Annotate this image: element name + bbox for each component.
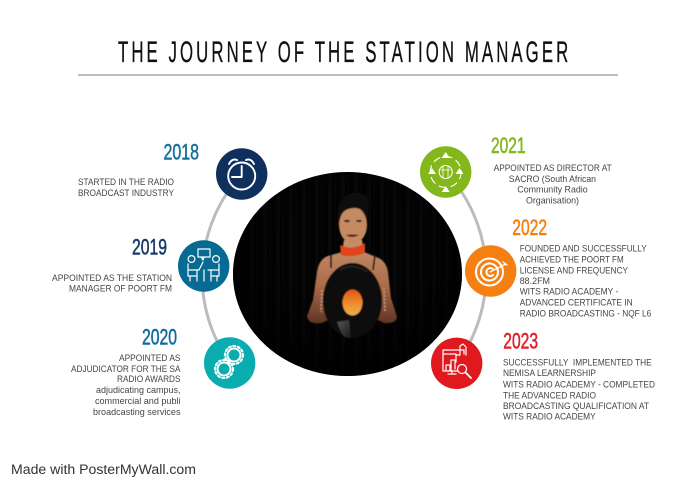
text: 2022 description [520,243,651,320]
icon: target 2022 [465,245,516,297]
text: 2023 description: THE ADVANCED RADIO [503,390,596,401]
text: 2023 description [503,358,655,423]
text: 2021 description: APPOINTED AS DIRECTOR AT [494,163,612,174]
text: 2019 description: APPOINTED AS THE STATION [52,273,172,284]
text: 2021 description: Community Radio [517,184,588,195]
text: 2022 description: WITS RADIO ACADEMY - [520,286,618,297]
text: 2022 description: ADVANCED CERTIFICATE IN [520,298,633,309]
text: 2020 description: commercial and publi [95,396,180,407]
text: 2022 description: FOUNDED AND SUCCESSFULLY [520,243,647,254]
title: THE JOURNEY OF THE STATION MANAGER [118,36,568,69]
text: 2021 description [494,163,612,206]
text: 2018 description [78,177,175,199]
text: 2021 description: SACRO (South African [509,174,596,185]
text: 2023 description: WITS RADIO ACADEMY [503,412,596,423]
footer credit: Made with PosterMyWall.com [11,462,196,477]
year: 2020: 2020 [142,324,177,350]
year: 2018: 2018 [164,140,199,164]
woman holding vinyl record [307,193,397,338]
icon: network 2021 [420,146,471,198]
icon: analytics 2023 [431,338,482,389]
text: 2023 description: SUCCESSFULLY IMPLEMENTED THE [503,358,652,369]
text: 2021 description: Organisation) [526,195,579,206]
text: 2022 description: ACHIEVED THE POORT FM [520,254,624,265]
text: 2018 description: STARTED IN THE RADIO [78,177,174,188]
text: 2020 description: adjudicating campus, [96,385,180,396]
text: 2022 description: 88.2FM [520,276,550,287]
timeline ring [202,172,486,363]
text: 2020 description: broadcasting services [93,407,181,418]
year: 2022: 2022 [512,215,547,240]
text: 2023 description: BROADCASTING QUALIFICATION AT [503,401,649,412]
text: 2023 description: WITS RADIO ACADEMY - COMPLETED [503,379,655,390]
text: 2023 description: NEMISA LEARNERSHIP [503,368,596,379]
text: 2019 description [52,273,172,294]
text: 2018 description: BROADCAST INDUSTRY [78,188,175,199]
title rule [78,74,618,76]
year: 2023: 2023 [503,328,538,354]
text: 2022 description: LICENSE AND FREQUENCY [520,265,629,276]
text: 2020 description: RADIO AWARDS [117,374,180,385]
icon: clock 2018 [216,148,267,200]
icon: gears 2020 [204,337,255,389]
text: 2020 description: APPOINTED AS [119,353,180,364]
text: 2022 description: RADIO BROADCASTING - NQF L6 [520,309,651,320]
year: 2021: 2021 [491,133,526,158]
text: 2020 description: ADJUDICATOR FOR THE SA [71,364,181,375]
text: 2019 description: MANAGER OF POORT FM [69,284,172,294]
central photo [230,170,465,378]
year: 2019: 2019 [132,234,167,260]
icon: meeting 2019 [178,240,229,292]
text: 2020 description [71,353,181,418]
